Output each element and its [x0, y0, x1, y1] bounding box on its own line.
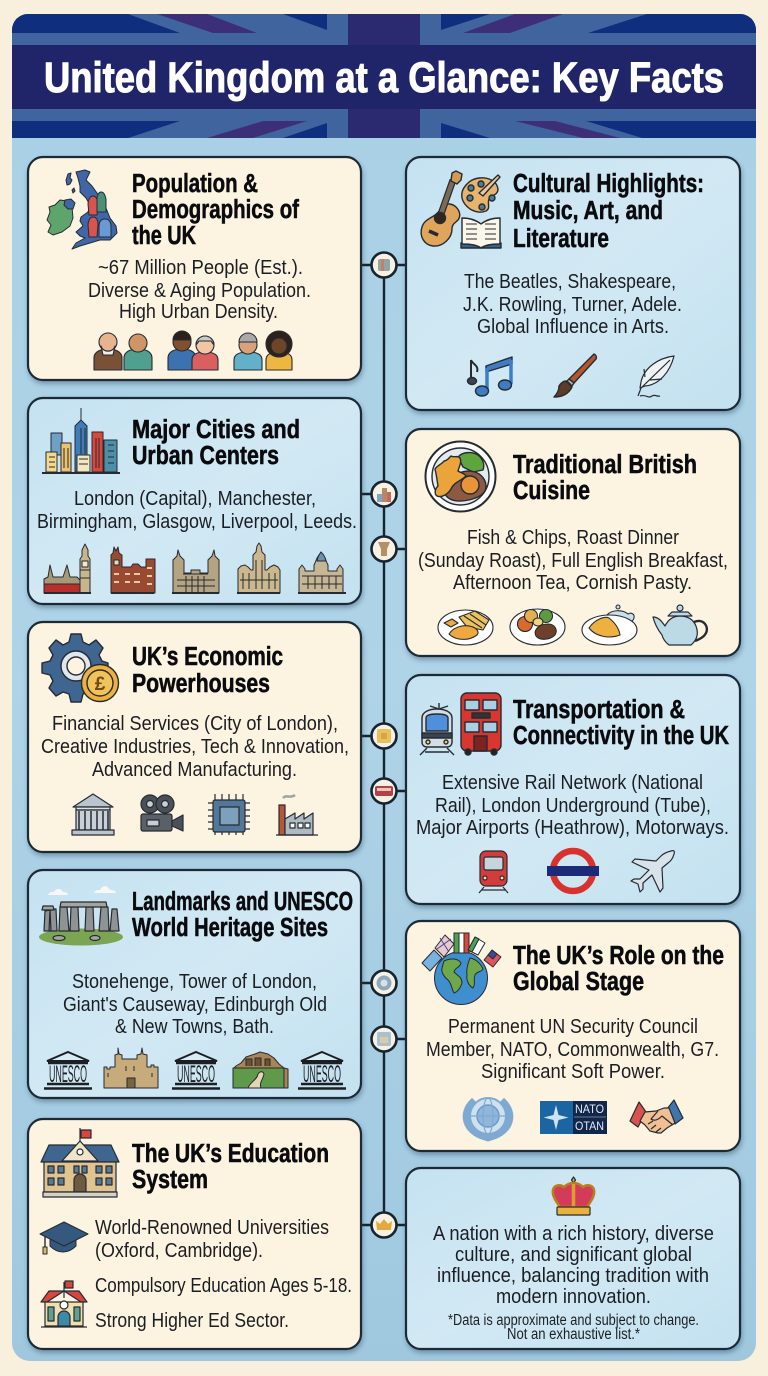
icon: NATO badge: [540, 1101, 607, 1134]
heading: Literature: [513, 225, 609, 253]
node: culture and people: [372, 252, 396, 278]
text block: modern innovation.: [496, 1285, 651, 1308]
panel: landmarks: UNESCO: [177, 1061, 215, 1088]
heading: [132, 416, 300, 470]
panel: global stage: [406, 921, 740, 1151]
text block: (Sunday Roast), Full English Breakfast,: [418, 549, 728, 572]
icon: factory: [276, 795, 318, 835]
text block: Financial Services (City of London),: [52, 712, 338, 735]
node: global role: [372, 1026, 396, 1052]
panel: summary: [406, 1168, 740, 1349]
text block: influence, balancing tradition with: [437, 1264, 709, 1287]
text block: Stonehenge, Tower of London,: [72, 970, 317, 993]
text block: Major Airports (Heathrow), Motorways.: [416, 816, 729, 839]
text block: Birmingham, Glasgow, Liverpool, Leeds.: [37, 510, 357, 533]
panel: landmarks: UNESCO: [49, 1061, 87, 1088]
text block: Significant Soft Power.: [481, 1060, 665, 1083]
panel: major cities: [28, 398, 361, 604]
footnote: Not an exhaustive list.*: [507, 1326, 640, 1343]
icon: Glasgow chambers: [172, 550, 219, 593]
text block: Diverse & Aging Population.: [88, 279, 311, 302]
text block: (Oxford, Cambridge).: [95, 1239, 263, 1262]
text block: J.K. Rowling, Turner, Adele.: [463, 293, 682, 316]
icon: crown: [553, 1177, 594, 1215]
heading: [513, 942, 724, 996]
panel: landmarks: UNESCO: [303, 1061, 341, 1088]
text block: [41, 712, 349, 781]
icon: UNESCO temple: [172, 1052, 220, 1088]
icon: Big Ben and Parliament: [44, 544, 91, 593]
icon: globe with flags: [422, 933, 501, 1004]
text block: [426, 1015, 719, 1083]
text block: Rail), London Underground (Tube),: [435, 794, 711, 817]
text block: [95, 1274, 352, 1332]
header banner: [12, 14, 756, 138]
text block: High Urban Density.: [119, 300, 278, 323]
heading: The UK’s Role on the: [513, 942, 724, 970]
icon: hill landscape: [233, 1052, 288, 1088]
footnote: [448, 1312, 699, 1343]
heading: Cultural Highlights:: [513, 170, 704, 198]
text block: [95, 1216, 329, 1262]
text block: The Beatles, Shakespeare,: [464, 270, 676, 293]
heading: Population &: [132, 170, 258, 198]
icon: tower of London: [104, 1048, 158, 1088]
heading: [132, 1140, 329, 1194]
icon: handshake: [630, 1100, 683, 1133]
heading: [513, 696, 729, 750]
icon: airplane: [631, 851, 674, 892]
icon: train and double-decker bus: [420, 693, 501, 755]
node: transport: [372, 778, 396, 804]
icon: NATO badge: NATO: [575, 1102, 604, 1116]
text block: Member, NATO, Commonwealth, G7.: [426, 1038, 719, 1061]
icon: paint brush: [554, 354, 596, 397]
icon: microchip: [208, 794, 250, 835]
icon: music notes: [468, 357, 512, 396]
heading: Traditional British: [513, 451, 697, 479]
node: cuisine: [372, 536, 396, 562]
icon: UK map: [47, 170, 117, 249]
heading: [132, 170, 299, 250]
icon: UNESCO temple: [298, 1052, 346, 1088]
icon: UNESCO temple: [44, 1052, 92, 1088]
panel: transportation: [406, 675, 740, 904]
heading: Demographics of: [132, 196, 299, 224]
icon: university building: [41, 1128, 119, 1197]
icon: underground roundel: [547, 851, 599, 891]
icon: teapot: [653, 605, 707, 645]
heading: Cuisine: [513, 477, 590, 505]
text block: culture, and significant global: [455, 1243, 692, 1266]
heading: Music, Art, and: [513, 197, 663, 225]
panel: economic powerhouses: [28, 622, 361, 852]
text block: & New Towns, Bath.: [115, 1015, 274, 1038]
text block: Compulsory Education Ages 5-18.: [95, 1274, 352, 1297]
text block: Afternoon Tea, Cornish Pasty.: [453, 571, 692, 594]
icon: cornish pasty and teapot: [582, 605, 637, 645]
icon: people: [94, 331, 292, 370]
text block: [433, 1222, 714, 1308]
text block: Permanent UN Security Council: [448, 1015, 698, 1038]
heading: the UK: [132, 222, 196, 250]
node: economy: [372, 724, 396, 748]
icon: roast dinner: [510, 609, 565, 645]
text block: Extensive Rail Network (National: [442, 771, 703, 794]
node: landmarks: [372, 970, 396, 996]
text block: [418, 526, 728, 594]
icon: city skyline: [42, 408, 120, 473]
text block: Advanced Manufacturing.: [92, 758, 297, 781]
panel: cultural highlights: [406, 157, 740, 410]
icon: stonehenge: [39, 886, 123, 946]
icon: UN emblem: [464, 1098, 512, 1140]
text block: Fish & Chips, Roast Dinner: [467, 526, 679, 549]
timeline connector: [361, 265, 407, 1225]
panel: landmarks: [28, 870, 361, 1098]
heading: [132, 888, 353, 942]
icon: guitar, palette and book: [421, 171, 501, 248]
icon: school house: [41, 1281, 87, 1327]
text block: ~67 Million People (Est.).: [98, 256, 303, 279]
icon: Liverpool Royal Liver Building: [237, 543, 280, 593]
text block: [463, 270, 682, 338]
icon: NATO badge: OTAN: [575, 1119, 604, 1133]
text block: London (Capital), Manchester,: [74, 487, 316, 510]
text block: [88, 256, 311, 323]
heading: Landmarks and UNESCO: [132, 888, 353, 916]
text block: [416, 771, 729, 839]
heading: System: [132, 1166, 208, 1194]
node: cities: [372, 482, 396, 506]
panel: population: [28, 157, 361, 380]
text block: Strong Higher Ed Sector.: [95, 1309, 289, 1332]
icon: film camera: [141, 795, 183, 831]
panel: traditional cuisine: [406, 429, 740, 656]
heading: Powerhouses: [132, 670, 270, 698]
text block: Giant's Causeway, Edinburgh Old: [63, 993, 327, 1016]
heading: [132, 643, 283, 698]
text block: A nation with a rich history, diverse: [433, 1222, 714, 1245]
icon: quill: [638, 356, 674, 397]
heading: Major Cities and: [132, 416, 300, 444]
icon: Manchester town hall: [111, 547, 155, 593]
text block: [63, 970, 327, 1038]
text block: [37, 487, 357, 533]
node: crown: [372, 1212, 396, 1238]
panel: education: [28, 1119, 361, 1349]
heading: World Heritage Sites: [132, 914, 328, 942]
text block: World-Renowned Universities: [95, 1216, 329, 1239]
footnote: *Data is approximate and subject to change.: [448, 1312, 699, 1329]
icon: fish and chips: [438, 610, 493, 645]
heading: [513, 451, 697, 505]
heading: Transportation &: [513, 696, 685, 724]
heading: The UK’s Education: [132, 1140, 329, 1168]
heading: [513, 170, 704, 253]
icon: Leeds town hall: [298, 552, 346, 593]
icon: dinner plate: [426, 442, 496, 512]
heading: Global Stage: [513, 968, 644, 996]
icon: red train: [479, 851, 508, 893]
text block: Creative Industries, Tech & Innovation,: [41, 735, 349, 758]
text block: Global Influence in Arts.: [477, 315, 669, 338]
icon: gear and pound coin: £: [95, 674, 106, 695]
icon: graduation cap: [40, 1222, 88, 1254]
icon: bank: [72, 794, 114, 835]
heading: UK’s Economic: [132, 643, 283, 671]
icon: gear and pound coin: [42, 634, 118, 702]
heading: Urban Centers: [132, 442, 279, 470]
